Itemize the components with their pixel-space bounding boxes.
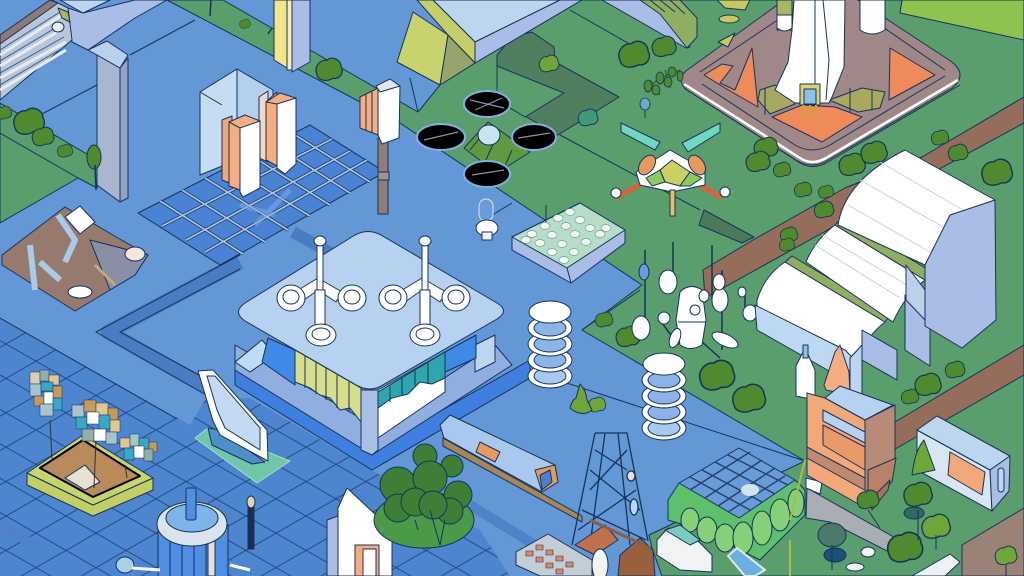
base plinth	[235, 360, 530, 470]
coil stack left	[528, 301, 572, 388]
mosaic tree middle	[72, 400, 120, 444]
pod on brown beam	[440, 415, 582, 522]
ground: tiled plaza grid	[0, 318, 510, 576]
brown tent at tower base	[575, 520, 655, 576]
corner column	[361, 390, 378, 455]
reflecting pool	[728, 548, 765, 576]
greenhouse	[668, 448, 805, 560]
ground: thin lot lines	[0, 10, 805, 461]
rotor: right	[512, 124, 556, 150]
white tower bottom	[327, 488, 392, 576]
planter with mosaic trees	[27, 370, 157, 516]
rocket engine door	[800, 84, 820, 120]
mosaic tree right	[120, 434, 157, 461]
blue recess left	[262, 338, 295, 385]
tree cluster on round base	[374, 444, 474, 548]
flying rig with teal blades	[611, 123, 730, 216]
ground: taupe path bottom right	[962, 508, 1024, 576]
flag and sign	[790, 460, 822, 576]
rocket boosters	[777, 0, 885, 34]
ground: brown path upper	[703, 97, 1024, 298]
drone	[417, 91, 556, 187]
tower: left orange and white	[222, 115, 260, 197]
ground: lime field	[900, 0, 1024, 40]
water tank	[116, 488, 250, 576]
central building	[235, 232, 530, 470]
pad orange left	[704, 48, 758, 107]
lattice oil tower	[572, 433, 648, 545]
rotor: top	[464, 91, 510, 117]
rocket gantry	[758, 85, 885, 115]
brown excavation with robot	[2, 206, 148, 311]
robots group	[632, 242, 757, 358]
building: yellow column	[274, 0, 310, 72]
valve flower	[116, 557, 134, 573]
small lamp	[476, 199, 498, 240]
ground: gray road	[806, 488, 908, 555]
blue recess right	[445, 335, 476, 372]
building: gray pillar	[88, 41, 128, 202]
yellow curtain	[295, 350, 361, 422]
pad orange bottom	[772, 105, 862, 142]
roof slab	[238, 232, 504, 389]
white perforated panel	[912, 554, 960, 576]
planter box with plants	[512, 203, 625, 283]
vault greenhouse: middle wall	[862, 330, 897, 380]
right wall	[372, 345, 512, 455]
vault greenhouse: rear wall	[905, 295, 930, 366]
small green tree on water	[570, 384, 606, 414]
ground: brown path lower	[890, 345, 1024, 452]
rotor: left	[417, 124, 465, 150]
white figure	[592, 549, 608, 576]
white greenhouse blocks	[657, 525, 712, 572]
rocket body	[775, 0, 845, 103]
side vent left	[235, 340, 275, 372]
keyboard pad machine	[516, 534, 592, 576]
solar panel field	[138, 125, 385, 265]
bushes: mid meadow	[539, 36, 1012, 412]
bushes: left strip	[0, 106, 101, 190]
green shapes beside pad	[717, 0, 750, 47]
white figure on road	[846, 547, 875, 571]
building: wedge with hatched cap	[602, 0, 697, 48]
pipe channel	[0, 232, 540, 548]
teal curtain	[378, 352, 445, 408]
signal pole	[360, 79, 400, 214]
white opening	[378, 352, 445, 438]
dark probe	[247, 496, 255, 549]
robot: small pods	[632, 270, 757, 351]
robot: main	[676, 286, 706, 348]
vault greenhouse: front	[755, 256, 890, 380]
building: tent with box	[397, 0, 582, 85]
satellite dish	[195, 370, 290, 483]
tower: right orange and white	[259, 91, 296, 174]
vault greenhouse: rear	[838, 150, 996, 348]
castle spire white	[796, 345, 815, 400]
ground: darker green patch	[497, 32, 619, 135]
ground: dark shed ramp	[699, 210, 754, 243]
ground: left green strip	[0, 103, 97, 223]
back room behind towers	[200, 69, 273, 180]
vault greenhouse: middle	[806, 218, 932, 322]
pad orange right	[889, 48, 935, 100]
side vent right	[475, 335, 495, 372]
rocket pad	[681, 0, 960, 166]
orange stepped building	[807, 345, 896, 510]
coil stack right	[642, 353, 686, 440]
left wall	[235, 345, 372, 455]
bushes: top strip	[210, 0, 342, 80]
dish pad	[195, 428, 290, 483]
dish reflector	[198, 370, 268, 461]
building: top left louvred block	[0, 0, 167, 100]
plants bottom right	[818, 482, 1017, 576]
roof light fixture right	[379, 236, 470, 346]
climbing vine	[640, 67, 683, 118]
machine box lower right	[912, 416, 1010, 511]
mosaic tree left	[30, 370, 62, 416]
rotor: bottom	[464, 161, 510, 187]
roof light fixture left	[277, 236, 366, 346]
